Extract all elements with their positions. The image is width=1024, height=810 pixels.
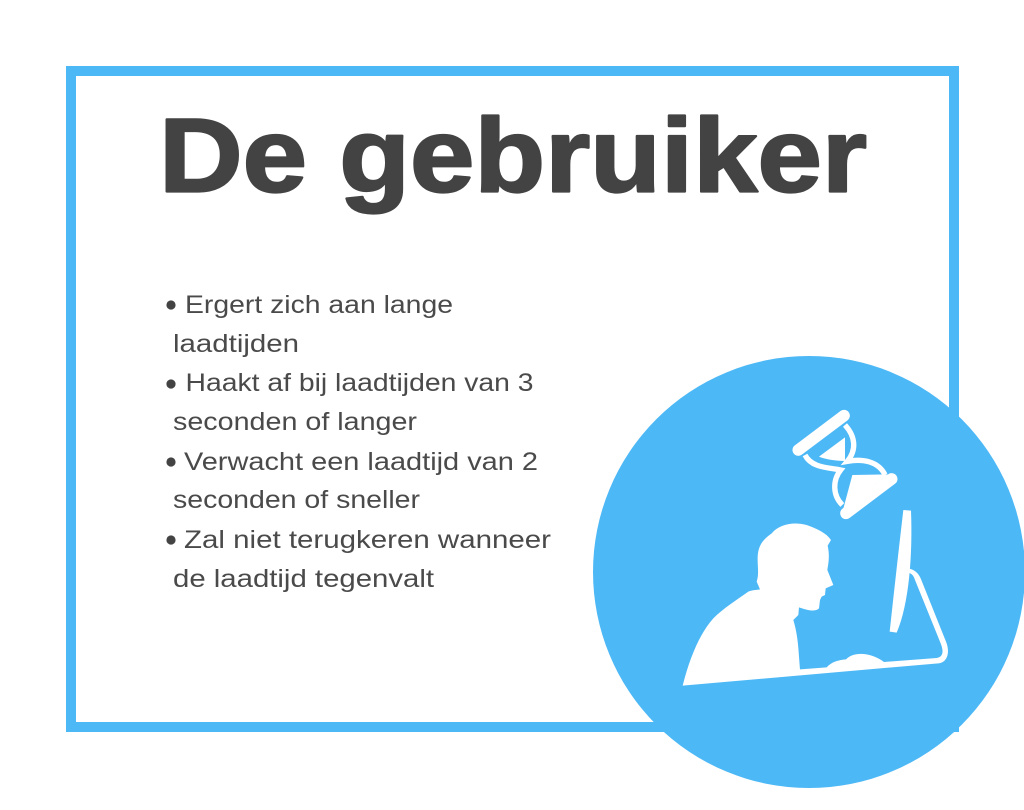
bullet item 3 (166, 448, 538, 514)
title: De gebruiker (159, 98, 867, 214)
icon: hourglass (798, 416, 892, 513)
bullet item 4: de laadtijd tegenvalt (173, 565, 434, 593)
bullet list (166, 291, 551, 593)
bullet item 2: Haakt af bij laadtijden van 3 (186, 369, 534, 397)
bullet item 3: Verwacht een laadtijd van 2 (184, 448, 538, 476)
bullet item 3: seconden of sneller (173, 486, 420, 514)
bullet item 2: seconden of langer (173, 408, 417, 436)
bullet item 1 (166, 291, 453, 358)
bullet item 4 (166, 526, 551, 593)
bullet item 4: Zal niet terugkeren wanneer (184, 526, 551, 554)
panel: blue frame (71, 71, 954, 727)
bullet item 1: laadtijden (173, 330, 299, 358)
blue circle (593, 356, 1024, 788)
icon: person silhouette and desk (683, 524, 948, 686)
icon: person at computer with hourglass (683, 416, 948, 686)
bullet item 1: Ergert zich aan lange (185, 291, 453, 319)
icon: monitor (890, 510, 911, 633)
bullet item 2 (166, 369, 534, 436)
